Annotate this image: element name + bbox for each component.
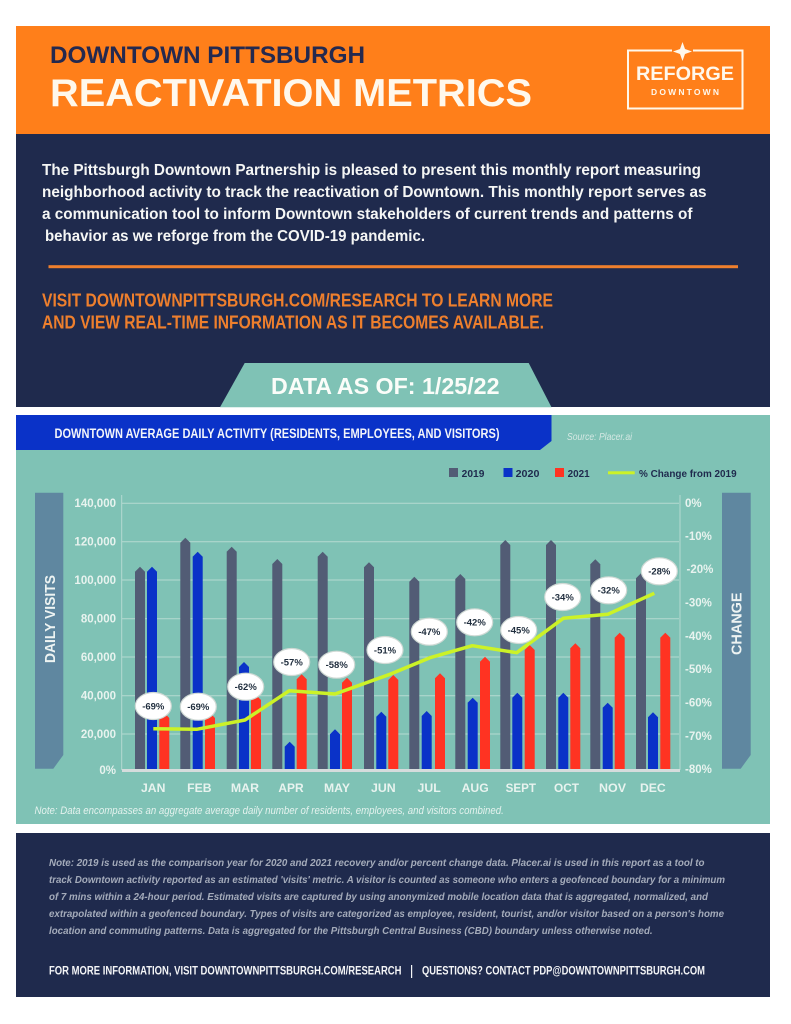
intro text: The Pittsburgh Downtown Partnership is pleased to present this monthly report measuring [42,162,701,179]
grid [122,495,680,770]
data date tab [220,363,552,407]
percent change values: -62% [235,682,257,693]
chart title banner [16,415,552,450]
legend: 2021 [568,469,590,480]
percent change values: -69% [142,701,165,712]
right axis labels: -50% [685,664,712,676]
intro text [42,162,707,245]
methodology note: Note: 2019 is used as the comparison year for 2020 and 2021 recovery and/or percent change data. Placer.ai is used in this report as a tool to [49,858,704,869]
methodology note [49,858,725,937]
percent change values: -42% [464,618,486,629]
right axis banner: CHANGE [730,592,746,655]
percent change values: -58% [326,660,348,671]
legend: 2020 [516,469,540,480]
left axis labels: 60,000 [81,652,116,664]
left axis labels: 140,000 [74,498,116,510]
legend [449,468,737,480]
left axis labels: 80,000 [81,614,116,626]
bar chart [135,538,670,769]
left axis labels: 100,000 [74,575,116,587]
contact line: FOR MORE INFORMATION, VISIT DOWNTOWNPITTSBURGH.COM/RESEARCH [49,966,402,978]
percent change values: -57% [281,657,303,668]
call to action: AND VIEW REAL-TIME INFORMATION AS IT BECOMES AVAILABLE. [42,312,544,332]
legend: 2019 [462,469,485,480]
bars: 2021 [159,633,670,769]
heading: Downtown Pittsburgh: DOWNTOWN PITTSBURGH [50,42,365,69]
percent change values: -28% [648,567,671,578]
right axis labels: 0% [685,498,702,510]
month labels [141,783,666,795]
right axis labels: -60% [685,698,712,710]
left axis banner [35,493,63,769]
data date tab: DATA AS OF: 1/25/22 [271,373,500,399]
source: Source: Placer.ai [567,431,633,443]
percent change values: -32% [598,586,620,597]
right axis labels: -80% [685,764,712,776]
panel: methodology footer [16,833,770,997]
chart note: Note: Data encompasses an aggregate average daily number of residents, employees, and visitors combined. [34,805,504,817]
right axis labels: -30% [685,598,712,610]
month labels: DEC [640,783,666,795]
month labels: JUL [418,783,441,795]
left axis labels: 40,000 [81,691,116,703]
call to action: VISIT DOWNTOWNPITTSBURGH.COM/RESEARCH TO LEARN MORE [42,290,553,310]
contact line [49,965,705,978]
right axis labels: -10% [685,531,712,543]
methodology note: location and commuting patterns. Data is aggregated for the Pittsburgh Central Business (CBD) boundary unless otherwise noted. [49,926,653,937]
month labels: FEB [187,783,212,795]
line: percent change from 2019 [153,593,654,729]
left axis banner: DAILY VISITS [43,575,59,663]
percent change values: -51% [374,645,397,656]
right axis banner [722,493,751,769]
percent change values: -47% [418,627,441,638]
logo: Reforge Downtown [628,42,742,108]
intro text: behavior as we reforge from the COVID-19 pandemic. [45,228,425,245]
chart title banner: DOWNTOWN AVERAGE DAILY ACTIVITY (RESIDENTS, EMPLOYEES, AND VISITORS) [54,426,500,441]
month labels: NOV [599,783,626,795]
legend: % Change from 2019 [639,469,737,480]
left axis labels [74,498,116,777]
call to action [42,290,553,332]
right axis labels [685,498,713,776]
contact line: QUESTIONS? CONTACT PDP@DOWNTOWNPITTSBURGH.COM [422,966,705,978]
left axis labels: 0% [99,765,116,777]
percent change values: -69% [187,702,210,713]
logo: Reforge Downtown: REFORGE [636,64,734,85]
panel: daily activity chart [16,415,770,824]
month labels: AUG [462,783,489,795]
intro text: a communication tool to inform Downtown stakeholders of current trends and patterns of [42,206,693,223]
percent change values: -34% [552,592,574,603]
month labels: MAR [231,783,260,795]
methodology note: track Downtown activity reported as an estimated 'visits' metric. A visitor is counted as someone who enters a geofenced boundary for a minimum [49,875,725,886]
panel: introduction [16,134,770,407]
percent change values [142,567,671,713]
month labels: SEPT [506,783,536,795]
methodology note: extrapolated within a geofenced boundary. Types of visits are categorized as employee, resident, tourist, and/or visitor based on a person's home [49,909,724,920]
month labels: APR [278,783,304,795]
percent change values: -45% [508,625,530,636]
right axis labels: -70% [685,731,712,743]
left axis labels: 120,000 [74,537,116,549]
right axis labels: -40% [685,631,712,643]
percent change bubbles [135,558,677,720]
header banner [16,26,770,134]
heading: Reactivation Metrics: REACTIVATION METRICS [50,72,532,115]
bars: 2019 [135,538,646,769]
right axis labels: -20% [686,564,713,576]
methodology note: of 7 mins within a 24-hour period. Estimated visits are captured by using anonymized mobile location data that is aggregated, normalized, and [49,892,709,903]
baseline [122,769,680,772]
month labels: JAN [141,783,165,795]
month labels: JUN [371,783,396,795]
logo: Reforge Downtown: DOWNTOWN [651,87,719,97]
intro text: neighborhood activity to track the reactivation of Downtown. This monthly report serves as [42,184,707,201]
month labels: OCT [554,783,579,795]
bars: 2020 [147,552,658,769]
left axis labels: 20,000 [81,729,116,741]
month labels: MAY [324,783,350,795]
